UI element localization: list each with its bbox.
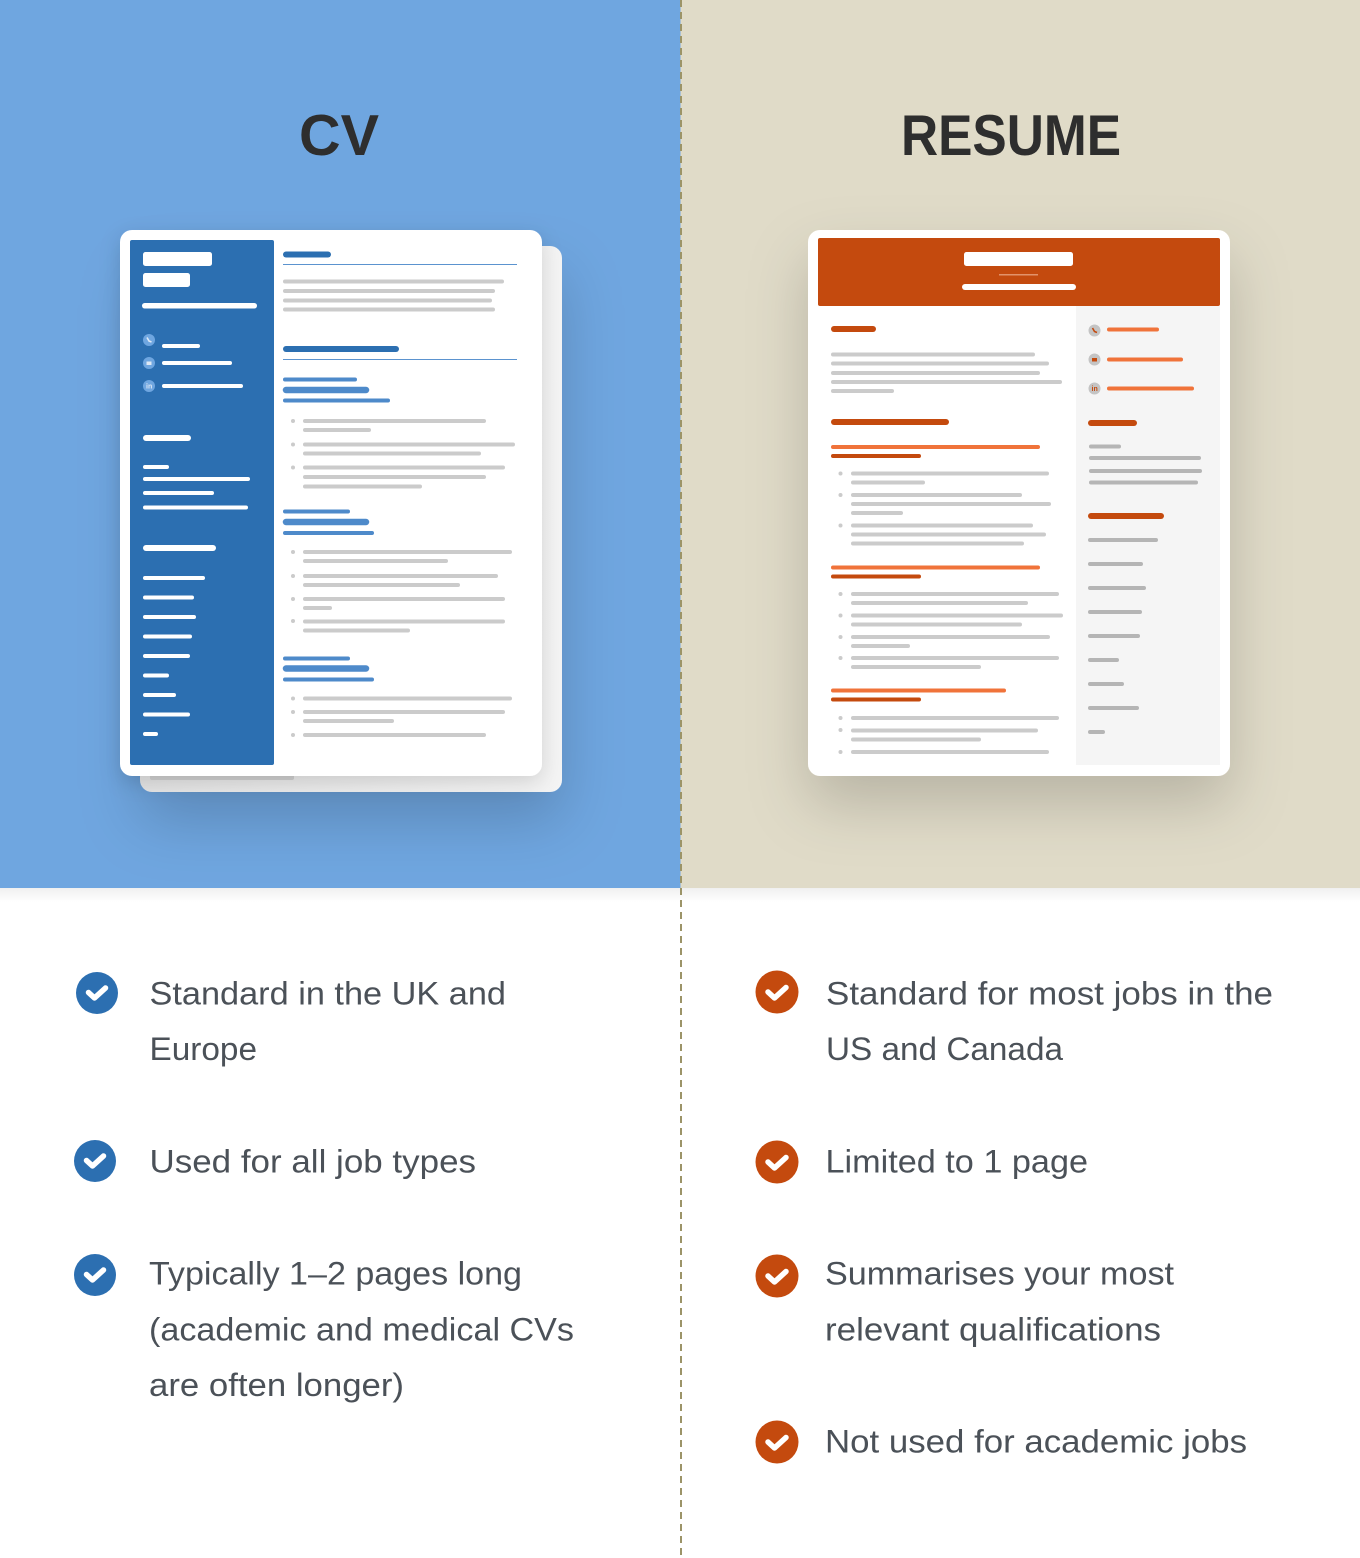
contact icons: in — [146, 384, 152, 390]
resume header band — [818, 238, 1220, 306]
item: US and Canada: US and Canada — [826, 1031, 1063, 1067]
center dashed divider — [680, 0, 682, 1558]
contact icons — [1088, 324, 1100, 394]
item: 1-2 pages: (academic and medical CVs — [149, 1312, 574, 1348]
back page — [140, 246, 562, 792]
item: standard in UK and Europe — [76, 972, 506, 1067]
item: all job types — [74, 1140, 476, 1182]
resume main column — [831, 326, 1061, 754]
contact icons: in — [1092, 386, 1098, 393]
CV main column — [283, 254, 517, 737]
page — [808, 230, 1230, 776]
item: not academic: Not used for academic jobs — [825, 1424, 1247, 1460]
heading: RESUME: RESUME — [901, 102, 1121, 167]
resume list — [756, 970, 1273, 1464]
panel: CV background — [0, 0, 680, 888]
CV document illustration — [120, 230, 562, 792]
item: 1-2 pages — [74, 1254, 574, 1403]
item: summarises: relevant qualifications — [825, 1312, 1161, 1348]
CV list — [74, 972, 574, 1403]
resume sidebar background — [1076, 306, 1220, 765]
item: summarises — [756, 1254, 1174, 1348]
resume document illustration — [808, 230, 1230, 776]
item: 1-2 pages: Typically 1–2 pages long — [149, 1256, 522, 1292]
front page — [120, 230, 542, 776]
item: summarises: Summarises your most — [825, 1256, 1174, 1292]
item: standard in UK and Europe: Standard in the UK and — [150, 976, 506, 1012]
resume sidebar content — [1088, 324, 1200, 732]
item: 1-2 pages: are often longer) — [149, 1367, 404, 1403]
item: not academic — [756, 1420, 1247, 1464]
item: standard in UK and Europe: Europe — [150, 1031, 257, 1067]
panel: resume background — [680, 0, 1360, 888]
item: US and Canada: Standard for most jobs in the — [826, 976, 1273, 1012]
item: all job types: Used for all job types — [150, 1144, 476, 1180]
heading: CV: CV — [299, 102, 379, 167]
CV sidebar — [130, 240, 274, 765]
item: one page: Limited to 1 page — [826, 1144, 1088, 1180]
item: US and Canada — [756, 970, 1273, 1067]
item: one page — [756, 1140, 1088, 1184]
contact icons — [143, 334, 155, 392]
